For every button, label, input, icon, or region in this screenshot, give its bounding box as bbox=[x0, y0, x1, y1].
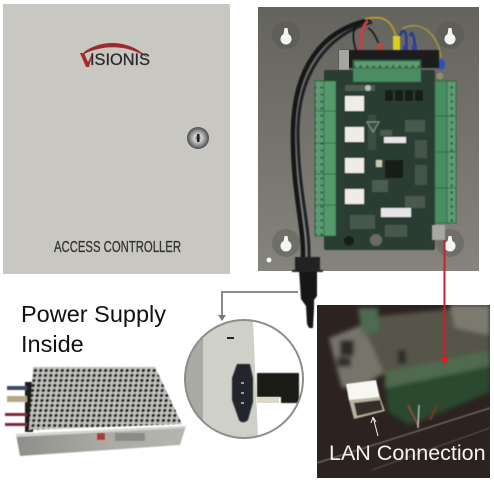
heading: power supply inside: Inside bbox=[21, 331, 84, 357]
circuit board bbox=[324, 70, 435, 250]
icon: key lock bbox=[187, 127, 209, 149]
logo: Visionis bbox=[80, 43, 150, 69]
arrow: plug to inlet bbox=[218, 292, 298, 321]
panel: open enclosure with circuit board bbox=[258, 7, 479, 271]
white labels bbox=[384, 137, 406, 143]
inlet socket bbox=[232, 364, 253, 422]
small components bbox=[344, 85, 427, 246]
panel: closed enclosure bbox=[3, 4, 230, 274]
arrow: port to LAN close-up bbox=[440, 240, 448, 365]
power supply photo bbox=[5, 367, 186, 456]
plug body bbox=[257, 373, 299, 403]
arrow: pointer to jack bbox=[371, 417, 378, 436]
relays bbox=[345, 96, 364, 111]
RJ45 jack bbox=[346, 380, 385, 419]
power inlet close-up circle bbox=[185, 320, 303, 438]
terminal wires bbox=[5, 382, 33, 432]
panel: LAN connection close-up bbox=[317, 305, 490, 478]
power plug and cord bbox=[292, 257, 323, 328]
logo: Visionis: ISIONIS bbox=[90, 51, 150, 69]
terminal blocks bbox=[315, 60, 456, 236]
RJ45 port bbox=[432, 225, 445, 240]
mounting keyholes bbox=[266, 21, 464, 262]
top metal bracket bbox=[339, 50, 439, 68]
heading: power supply inside bbox=[21, 301, 166, 357]
wire crimps bbox=[377, 36, 445, 80]
label: access controller: ACCESS CONTROLLER bbox=[54, 239, 181, 256]
heading: power supply inside: Power Supply bbox=[21, 301, 166, 327]
cable bundle bbox=[293, 20, 372, 258]
wires to terminals bbox=[353, 18, 441, 60]
label: LAN connection: LAN Connection bbox=[329, 441, 486, 465]
